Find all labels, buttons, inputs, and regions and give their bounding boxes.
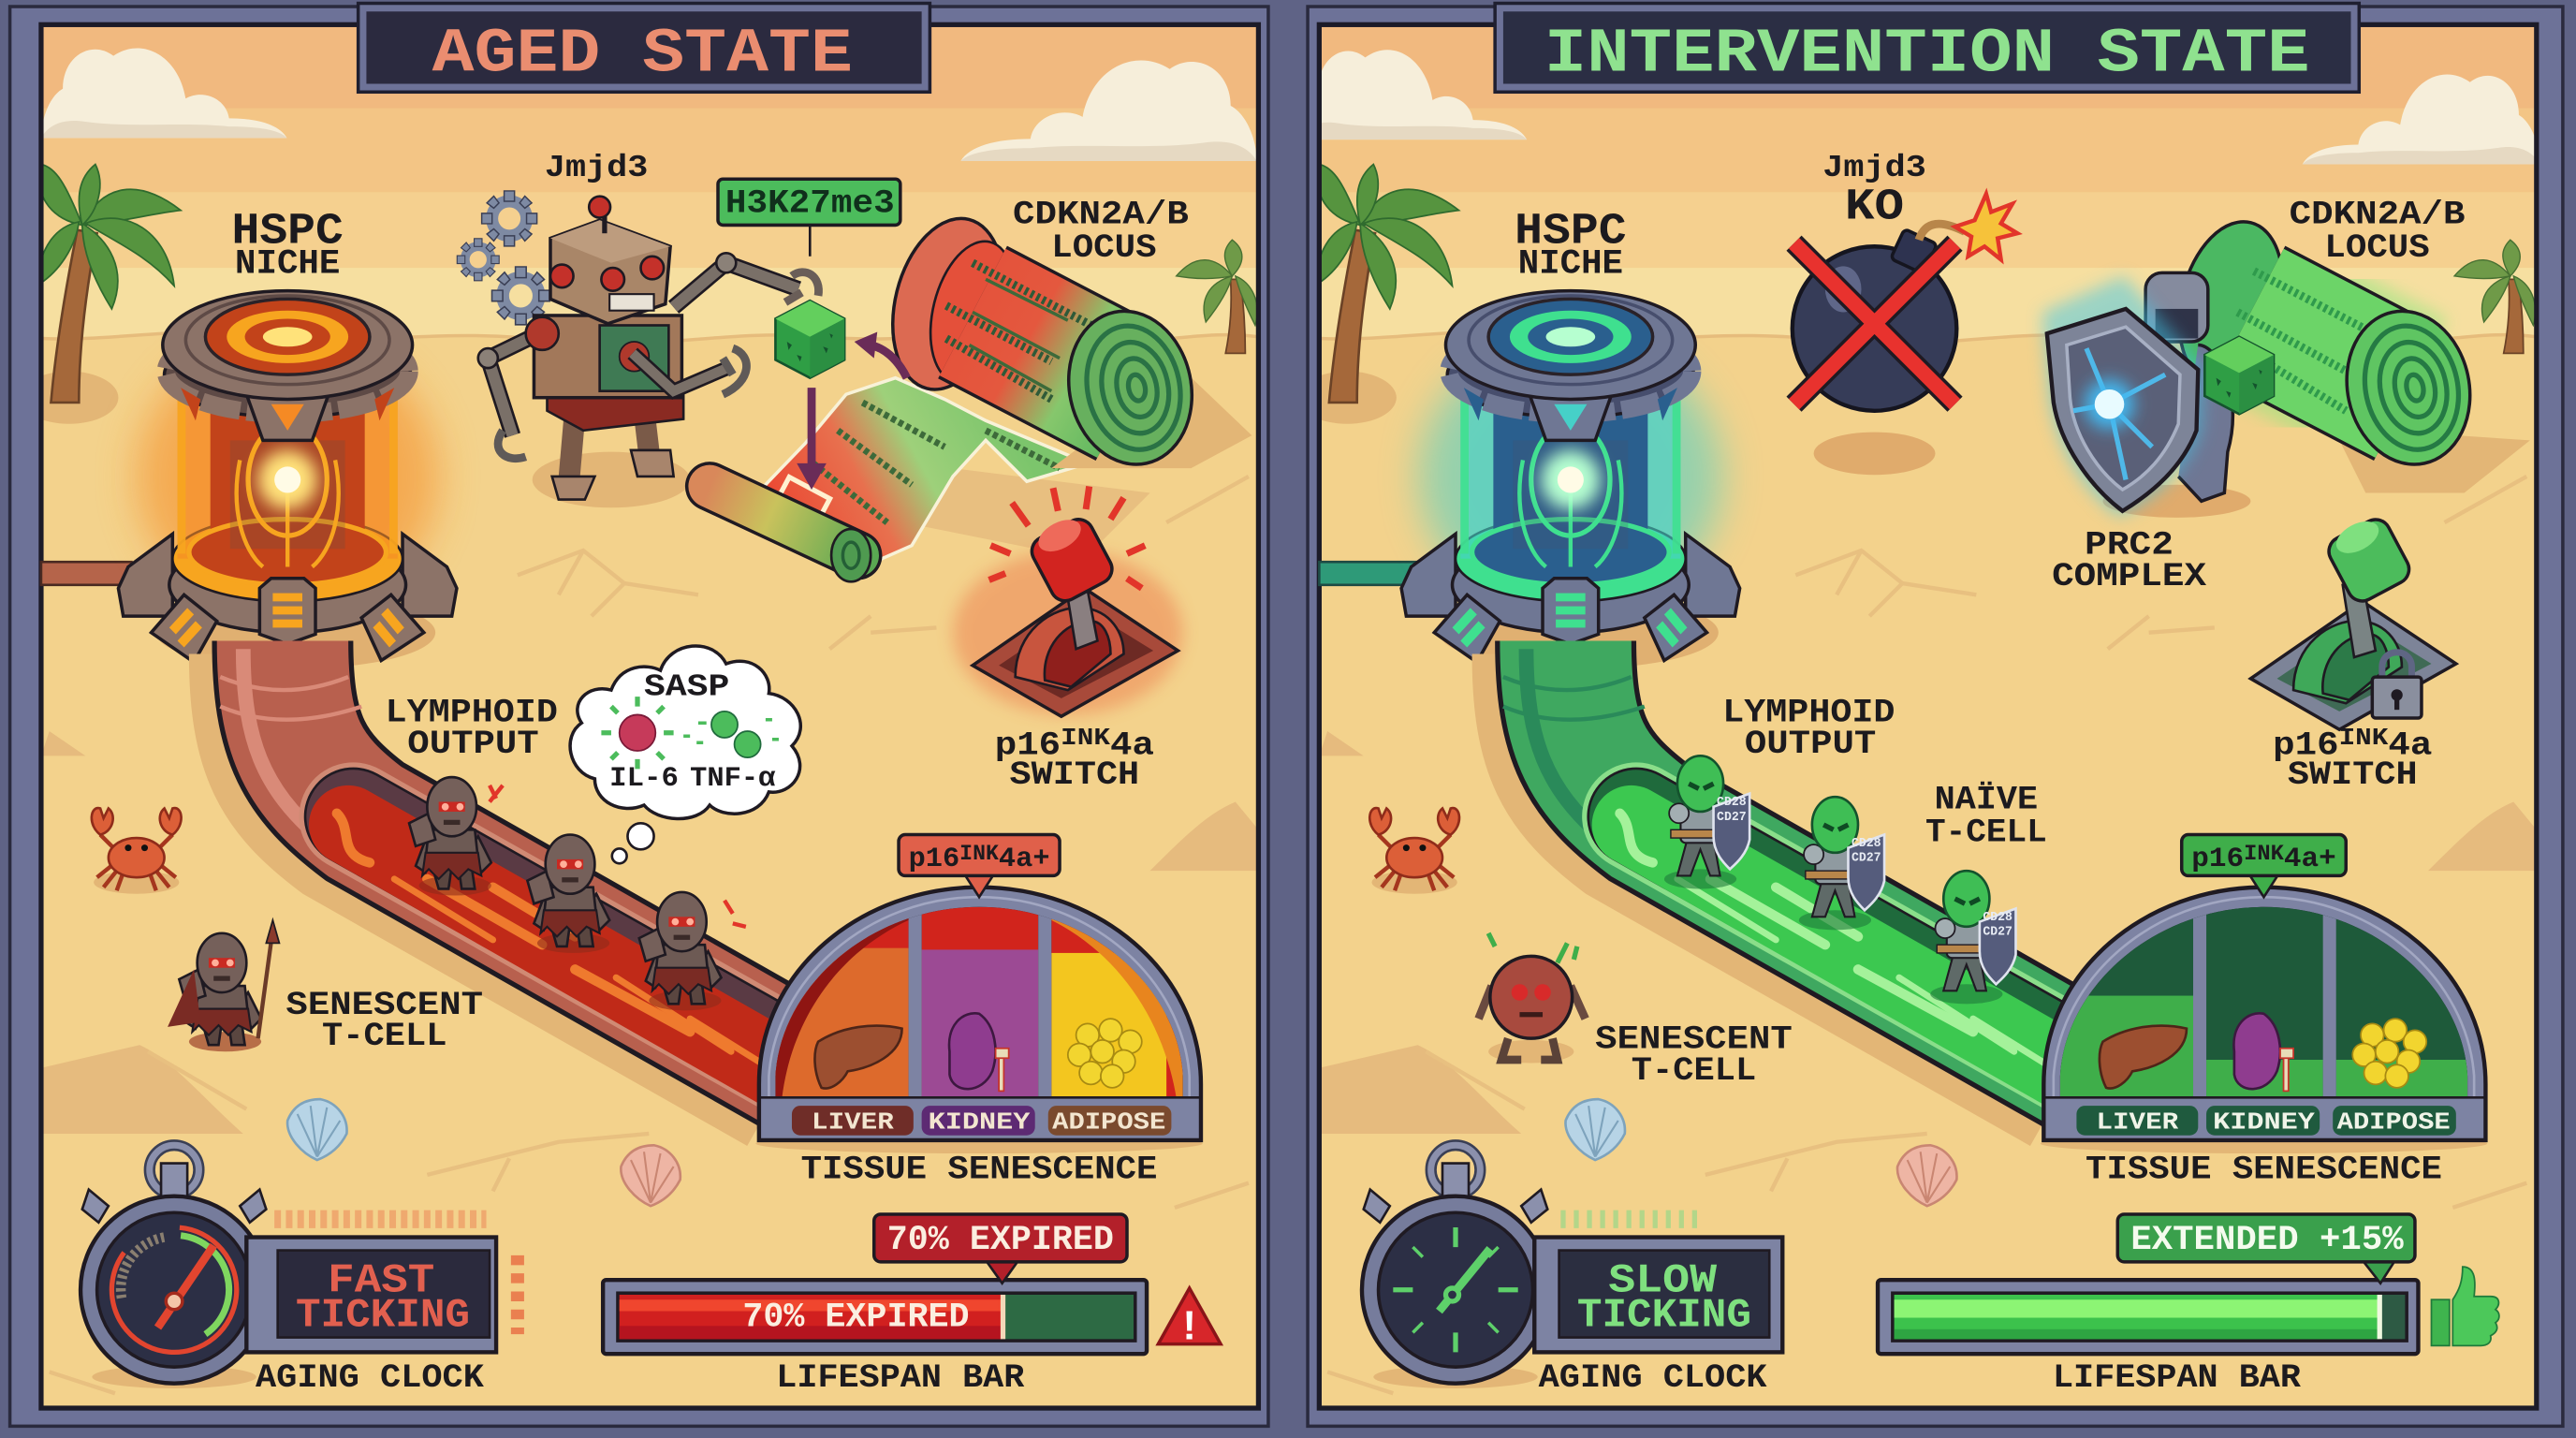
- label: p16INK4a switch: [2273, 724, 2432, 794]
- shield markers: CD27: [1983, 925, 2012, 940]
- blue shell: [1565, 1099, 1625, 1160]
- sand border: [1319, 24, 2537, 1408]
- title plate: aged state: [359, 4, 929, 92]
- pink shell: [621, 1145, 681, 1206]
- PRC2 complex knight with shield: [2042, 272, 2274, 518]
- lifespan bar: 70% expired: 70% EXPIRED: [742, 1298, 970, 1337]
- HSPC niche reactor: restored: [1319, 291, 1740, 668]
- shield markers: CD28: [1983, 910, 2012, 925]
- shield markers: CD28: [1852, 836, 1881, 851]
- label: p16INK4a switch: SWITCH: [1010, 756, 1139, 794]
- organ pills: [2076, 1106, 2456, 1137]
- crab: [92, 808, 182, 894]
- label: HSPC niche: HSPC: [1515, 208, 1627, 257]
- label: PRC2 complex: [2052, 526, 2207, 595]
- sandy beach background: aged: [20, 24, 1258, 1408]
- organs: [814, 1013, 1142, 1091]
- tag: p16INK4a+: p16: [2191, 843, 2242, 874]
- shield markers: CD28: [1717, 795, 1747, 810]
- gauge chambers: [2060, 903, 2471, 1101]
- aging clock: fast: FAST: [328, 1257, 434, 1304]
- aging clock: fast: [80, 1145, 518, 1388]
- label: PRC2 complex: COMPLEX: [2052, 558, 2207, 595]
- callout: 70% expired: 70% EXPIRED: [887, 1221, 1114, 1260]
- title plate: aged state: AGED STATE: [432, 19, 853, 90]
- tag: p16INK4a+: p16: [909, 843, 959, 874]
- tissue senescence dome gauge: low: [2041, 888, 2487, 1153]
- cleared senescent cell: [1479, 933, 1586, 1064]
- SASP thought cloud: SASP: [644, 669, 729, 705]
- tag: p16INK4a+: 4a+: [999, 843, 1050, 874]
- label: naive T-cell: [1925, 781, 2047, 852]
- label: Jmjd3 KO: Jmjd3: [1822, 151, 1926, 186]
- label: lifespan bar: LIFESPAN BAR: [2053, 1359, 2302, 1397]
- icon: thumbs up: [2431, 1267, 2499, 1345]
- sandy beach background: intervention: [1298, 24, 2539, 1408]
- CDKN2A/B locus roll: silenced: [2163, 211, 2530, 493]
- crab: [1369, 808, 1459, 894]
- label: senescent T-cell: SENESCENT: [285, 987, 483, 1024]
- label: senescent T-cell: T-CELL: [1632, 1052, 1756, 1090]
- naive T-cell soldiers: [1664, 756, 2015, 1004]
- label: naive T-cell: T-CELL: [1925, 814, 2047, 852]
- label: HSPC niche: NICHE: [1518, 244, 1623, 284]
- HSPC niche reactor: aged: [41, 291, 457, 668]
- label: p16INK4a switch: p16: [995, 727, 1054, 765]
- senescent T-cells in pipe: [409, 777, 746, 1010]
- label: p16INK4a switch: [995, 724, 1154, 794]
- gauge chambers: [775, 903, 1186, 1101]
- organs: [2100, 1013, 2426, 1091]
- callout: 70% expired: [874, 1214, 1127, 1284]
- SASP thought cloud: TNF-α: [690, 762, 776, 794]
- unrolled DNA scroll: [710, 378, 1150, 581]
- shield markers: CD27: [1852, 851, 1881, 866]
- title plate: intervention state: [1495, 4, 2359, 92]
- SASP thought cloud: IL-6: [609, 762, 679, 794]
- tag: p16INK4a+: INK: [959, 842, 999, 866]
- tick trail: [1560, 1214, 1705, 1225]
- label: CDKN2A/B locus: [1013, 197, 1189, 267]
- icon: crossed-out bomb: [1793, 194, 2017, 475]
- dial: [1393, 1227, 1518, 1352]
- label: senescent T-cell: [1595, 1021, 1793, 1090]
- sand border: [41, 24, 1258, 1408]
- aging clock: slow: TICKING: [1577, 1292, 1751, 1339]
- label: p16INK4a switch: INK: [2339, 724, 2389, 752]
- aging clock: fast: TICKING: [296, 1292, 470, 1339]
- shells: [287, 1099, 347, 1160]
- tag: p16INK4a+: [899, 835, 1060, 897]
- label: lymphoid output: OUTPUT: [1745, 726, 1876, 763]
- senescent T-cell warrior: [168, 920, 279, 1051]
- label: HSPC niche: NICHE: [235, 244, 340, 284]
- organ pills: LIVER: [2096, 1108, 2178, 1137]
- SASP thought cloud: [570, 646, 800, 863]
- label: naive T-cell: NAÏVE: [1935, 781, 2038, 818]
- label: lymphoid output: [1722, 694, 1895, 763]
- tag: H3K27me3: [718, 179, 900, 257]
- organ pills: ADIPOSE: [2337, 1108, 2451, 1137]
- Jmjd3 label: Jmjd3: [545, 151, 648, 186]
- label: lymphoid output: [386, 694, 558, 763]
- aging clock: slow: SLOW: [1608, 1257, 1718, 1304]
- label: aging clock: AGING CLOCK: [1539, 1359, 1768, 1397]
- organ pills: LIVER: [812, 1108, 894, 1137]
- organ pills: KIDNEY: [929, 1108, 1031, 1137]
- icon: warning triangle: [1158, 1288, 1221, 1348]
- tag: p16INK4a+: [2182, 835, 2346, 897]
- robot: Jmjd3 demethylase: [478, 197, 819, 507]
- panel: aged state: [10, 4, 1268, 1426]
- label: PRC2 complex: PRC2: [2085, 526, 2174, 564]
- label: lymphoid output: OUTPUT: [407, 726, 539, 763]
- label: lymphoid output: LYMPHOID: [386, 694, 558, 731]
- label: senescent T-cell: SENESCENT: [1595, 1021, 1793, 1059]
- p16 switch: locked off: [2250, 514, 2456, 729]
- label: HSPC niche: [1515, 208, 1627, 284]
- arrow: methyl removal: [797, 332, 907, 490]
- lifespan bar: 70% expired: [603, 1280, 1147, 1354]
- lifespan bar: extended: [1878, 1280, 2418, 1354]
- label: CDKN2A/B locus: CDKN2A/B: [1013, 197, 1189, 234]
- p16 switch: on: [953, 486, 1183, 716]
- panel: intervention state: [1298, 4, 2563, 1426]
- slow ticking display: [1534, 1238, 1782, 1352]
- label: Jmjd3 KO: KO: [1845, 183, 1904, 232]
- tag: p16INK4a+: 4a+: [2284, 843, 2336, 874]
- icon: gears: [457, 191, 549, 325]
- organ pills: KIDNEY: [2213, 1108, 2315, 1137]
- title plate: intervention state: INTERVENTION STATE: [1544, 19, 2310, 90]
- tissue senescence dome gauge: [755, 888, 1203, 1153]
- label: CDKN2A/B locus: [2290, 197, 2465, 267]
- callout: extended +15%: EXTENDED +15%: [2130, 1221, 2405, 1260]
- label: senescent T-cell: T-CELL: [322, 1018, 446, 1055]
- icon: padlock: [2372, 653, 2422, 718]
- label: tissue senescence: TISSUE SENESCENCE: [801, 1151, 1157, 1188]
- CDKN2A/B locus roll: [876, 207, 1251, 476]
- icon: warning triangle: !: [1182, 1302, 1196, 1348]
- callout: extended +15%: [2117, 1214, 2415, 1284]
- dial: [107, 1222, 242, 1357]
- aging clock: slow: [1362, 1145, 1782, 1388]
- blood pipe with senescent cells: [220, 640, 805, 1084]
- fast ticking display: [246, 1238, 496, 1352]
- label: p16INK4a switch: SWITCH: [2288, 756, 2418, 794]
- label: p16INK4a switch: INK: [1061, 724, 1110, 752]
- label: CDKN2A/B locus: LOCUS: [1051, 229, 1157, 267]
- label: aging clock: AGING CLOCK: [256, 1359, 485, 1397]
- label: CDKN2A/B locus: CDKN2A/B: [2290, 197, 2465, 234]
- healthy green pipe: [1503, 640, 2088, 1084]
- organ pills: [792, 1106, 1171, 1137]
- tick trail: [274, 1214, 487, 1225]
- shield markers: CD27: [1717, 810, 1747, 825]
- label: p16INK4a switch: 4a: [2388, 727, 2432, 765]
- tag: H3K27me3: H3K27me3: [725, 184, 895, 222]
- label: Jmjd3 KO: [1822, 151, 1926, 232]
- pink shell: [1897, 1145, 1956, 1206]
- label: senescent T-cell: [285, 987, 483, 1055]
- label: p16INK4a switch: p16: [2273, 727, 2332, 765]
- label: p16INK4a switch: 4a: [1110, 727, 1154, 765]
- tag: p16INK4a+: INK: [2244, 842, 2284, 866]
- shield markers: [1717, 795, 2012, 940]
- label: tissue senescence: TISSUE SENESCENCE: [2086, 1151, 2442, 1188]
- panel frame: intervention: [1308, 7, 2563, 1426]
- icon: methyl mark cube: [775, 301, 844, 378]
- label: HSPC niche: HSPC: [232, 208, 344, 257]
- label: lifespan bar: LIFESPAN BAR: [776, 1359, 1025, 1397]
- label: HSPC niche: [232, 208, 344, 284]
- organ pills: ADIPOSE: [1052, 1108, 1165, 1137]
- label: CDKN2A/B locus: LOCUS: [2324, 229, 2430, 267]
- label: lymphoid output: LYMPHOID: [1722, 694, 1895, 731]
- panel frame: aged: [10, 7, 1268, 1426]
